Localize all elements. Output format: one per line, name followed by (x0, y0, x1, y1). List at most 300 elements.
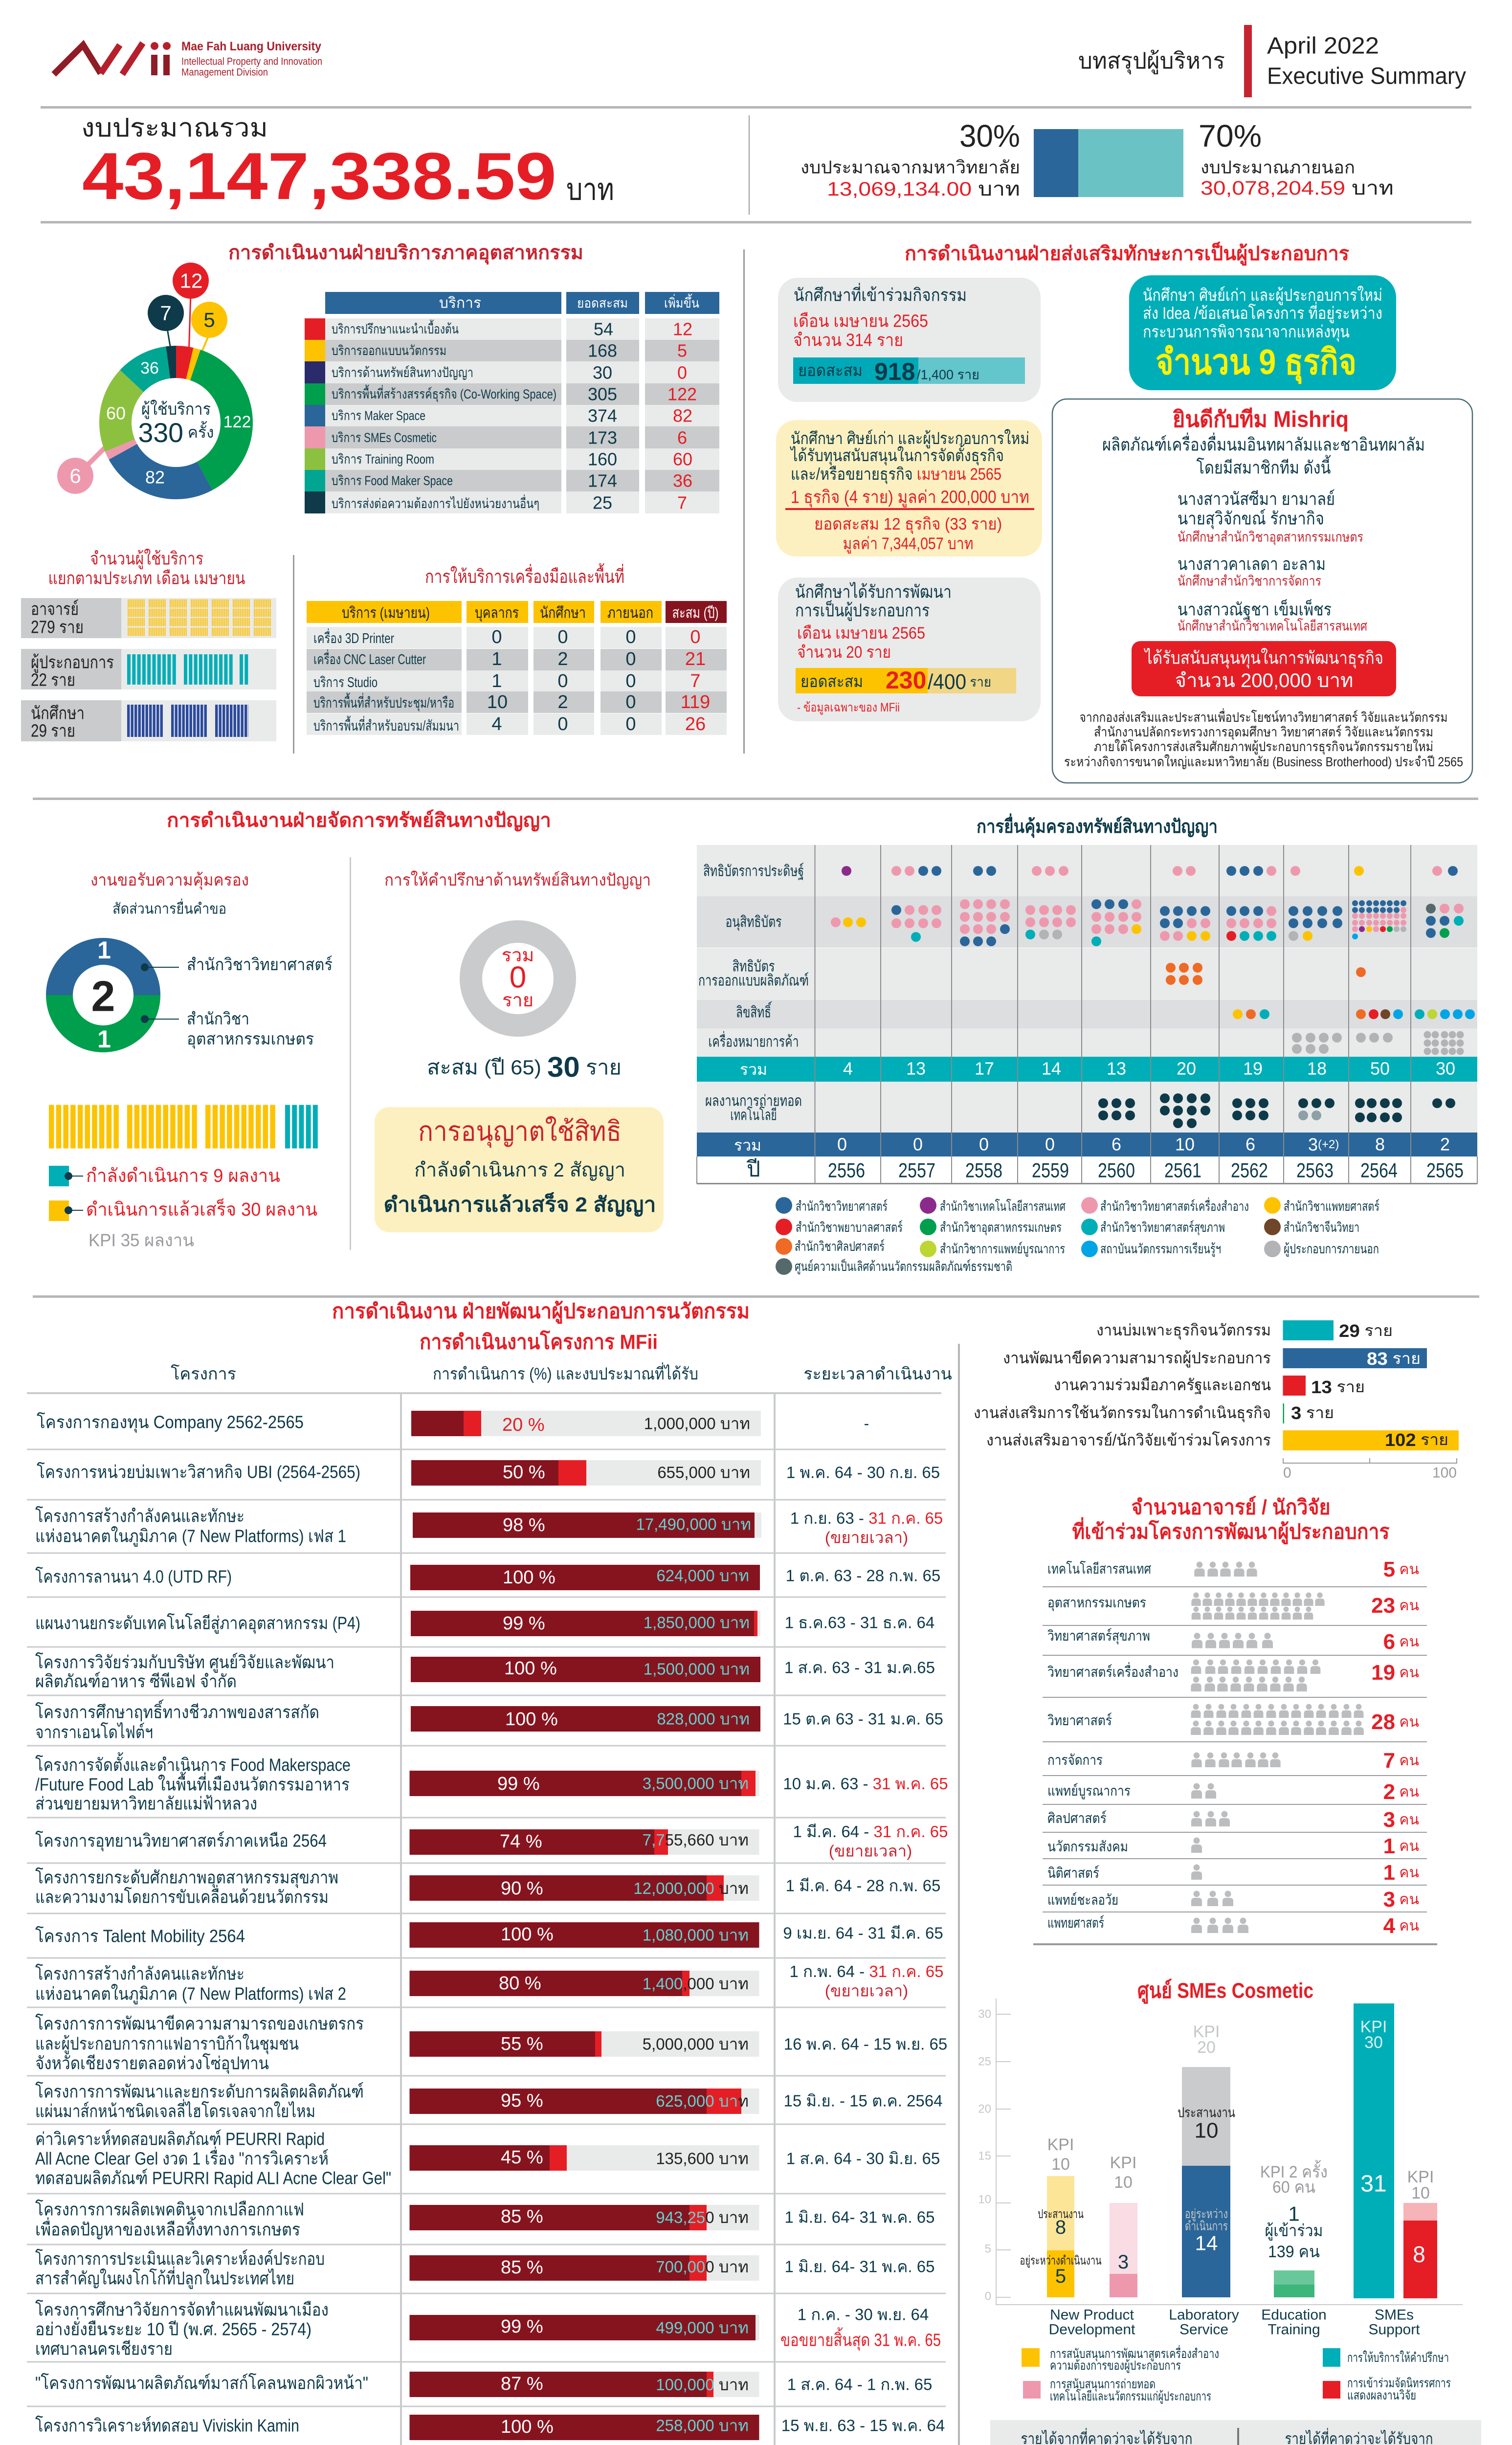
label: external budget: งบประมาณภายนอก (1201, 157, 1355, 177)
panel: industry services (21, 242, 727, 741)
chart: SMEs cosmetic: 31 (1360, 2171, 1387, 2197)
years row: 2564 (1360, 1159, 1398, 1181)
years row: 2557 (898, 1159, 935, 1181)
row: project 10 (35, 1867, 940, 1907)
table header: ระยะเวลาดำเนินงาน (803, 1365, 952, 1383)
chart: IP filings by year: อนุสิทธิบัตร (726, 913, 781, 931)
row: project 5: 1 ธ.ค.63 - 31 ธ.ค. 64 (785, 1614, 934, 1631)
row: project 13 (35, 2014, 947, 2074)
table: services: 374 (588, 406, 617, 425)
heading: users by type (48, 549, 245, 588)
years row (828, 1159, 1464, 1181)
table: tools and space: เครื่อง CNC Laser Cutter (313, 649, 426, 667)
chart: request ratio donut: 1 (97, 1025, 111, 1053)
table: tools and space: 21 (685, 649, 706, 669)
totals row: filings: 18 (1307, 1058, 1327, 1079)
row: project 7 (35, 1699, 943, 1742)
row: project 19: 87 % (501, 2374, 543, 2394)
table: services: บริการ Food Maker Space (332, 473, 453, 488)
row: project 15: 135,600 บาท (656, 2150, 749, 2167)
row: project 15: 45 % (501, 2147, 543, 2168)
row: project 3: 17,490,000 บาท (636, 1515, 751, 1534)
table: tools and space: บริการพื้นที่สำหรับประชุม/หารือ (313, 692, 454, 711)
chart: request ratio donut: สำนักวิชาวิทยาศาสตร์ (187, 956, 333, 974)
card: licensing: กำลังดำเนินการ 2 สัญญา (414, 1159, 625, 1181)
row: project 1: โครงการกองทุน Company 2562-2565 (37, 1412, 304, 1433)
legend: schools: สำนักวิชาพยาบาลศาสตร์ (796, 1220, 903, 1235)
row: project 17: โครงการการประเมินและวิเคราะห์องค์ประกอบ (35, 2248, 325, 2269)
pictogram: researchers by school: ศิลปศาสตร์ (1047, 1810, 1107, 1826)
row: project 8: โครงการจัดตั้งและดำเนินการ Food Makerspace (35, 1752, 351, 1775)
row: project 20: 258,000 บาท (656, 2417, 749, 2434)
chart: SMEs cosmetic: 5 (985, 2243, 991, 2255)
dots: copyright (1233, 1009, 1475, 1019)
legend: schools: สถาบันนวัตกรรมการเรียนรู้ฯ (1100, 1242, 1221, 1257)
row: project 5: 99 % (503, 1613, 545, 1634)
row: project 11: 100 % (501, 1924, 554, 1945)
card: congratulations Mishriq: นักศึกษาสำนักวิชาการจัดการ (1178, 573, 1321, 589)
chart: activity bars: งานบ่มเพาะธุรกิจนวัตกรรม (1096, 1321, 1271, 1340)
pictogram: students: นักศึกษา (31, 703, 85, 723)
legend: schools: ศูนย์ความเป็นเลิศด้านนวัตกรรมผลิตภัณฑ์ธรรมชาติ (795, 1258, 1012, 1274)
card: congratulations Mishriq: ผลิตภัณฑ์เครื่องดื่มนมอินทผาลัมและชาอินทผาลัม (1102, 432, 1425, 455)
chart: SMEs cosmetic: 15 (978, 2150, 991, 2162)
row: project 10: 90 % (501, 1878, 543, 1899)
years row: 2563 (1296, 1159, 1334, 1181)
header: logo and title (54, 25, 1466, 97)
KPI label: KPI 35 ผลงาน (89, 1230, 194, 1250)
table: services: 0 (677, 363, 687, 382)
legend: SMEs cosmetic: การสนับสนุนการพัฒนาสูตรเครื่องสำอาง (1050, 2345, 1219, 2361)
chart: IP filings by year: ลิขสิทธิ์ (736, 1000, 772, 1021)
chart: IP filings by year: สิทธิบัตรการประดิษฐ์ (703, 863, 804, 880)
dots: trademarks (1292, 1031, 1464, 1055)
years row: 2565 (1426, 1159, 1464, 1181)
row: project 15 (35, 2129, 940, 2188)
row: project 19: 1 ส.ค. 64 - 1 ก.พ. 65 (787, 2376, 932, 2393)
chart: SMEs cosmetic: New Product (1050, 2307, 1134, 2323)
row: project 20: 15 พ.ย. 63 - 15 พ.ค. 64 (781, 2417, 945, 2434)
chart: IP filings by year: รวม (740, 1061, 767, 1078)
row: project 5: แผนงานยกระดับเทคโนโลยีสู่ภาคอุตสาหกรรม (P4) (35, 1613, 360, 1634)
heading: IP filing chart: การยื่นคุ้มครองทรัพย์สินทางปัญญา (977, 813, 1218, 838)
stat: external 70%: 70% (1199, 118, 1262, 154)
chart: SMEs cosmetic: 8 (1055, 2217, 1066, 2238)
heading: SMEs cosmetic: ศูนย์ SMEs Cosmetic (1137, 1978, 1313, 2004)
row: project 8: /Future Food Lab ในพื้นที่เมืองนวัตกรรมอาหาร (35, 1771, 350, 1795)
row: project 14 (35, 2081, 942, 2121)
chart: IP filings by year: เทคโนโลยี (731, 1106, 777, 1124)
card: congratulations Mishriq: จำนวน 200,000 บาท (1175, 670, 1354, 691)
table: services: บริการส่งต่อความต้องการไปยังหน่วยงานอื่นๆ (332, 494, 539, 511)
row: project 13: โครงการการพัฒนาขีดความสามารถของเกษตรกร (35, 2014, 364, 2033)
table: services: 82 (673, 406, 692, 425)
table: tools and space: 1 (491, 671, 502, 691)
table: tools and space: 0 (690, 627, 701, 647)
row: project 10: 1 มี.ค. 64 - 28 ก.พ. 65 (786, 1877, 940, 1894)
logo: MFii: Mae Fah Luang University (181, 40, 321, 53)
legend: schools: สำนักวิชาอุตสาหกรรมเกษตร (940, 1220, 1062, 1236)
chart: SMEs cosmetic: Laboratory (1169, 2307, 1239, 2323)
row: project 3: แห่งอนาคตในภูมิภาค (7 New Platforms) เฟส 1 (35, 1526, 346, 1547)
table: services: 6 (677, 427, 687, 448)
table: services: 60 (673, 449, 692, 469)
totals row: transfer: 0 (1045, 1134, 1055, 1154)
row: project 17: สารสำคัญในผงโกโก้ที่ปลูกในประเทศไทย (35, 2266, 294, 2289)
chart: SMEs cosmetic: KPI (1193, 2023, 1220, 2041)
row: project 16: 85 % (501, 2206, 543, 2227)
table: services: บริการพื้นที่สร้างสรรค์ธุรกิจ (Co-Working Space) (332, 384, 556, 402)
logo: MFii: Management Division (181, 67, 268, 78)
chart: service users donut: 82 (145, 467, 165, 487)
row: project 9: (ขยายเวลา) (829, 1842, 912, 1860)
panel: innovation entrepreneur development (27, 1300, 952, 2445)
totals row: transfer: 8 (1375, 1134, 1385, 1154)
legend: SMEs cosmetic: การเข้าร่วมจัดนิทรรศการ (1347, 2376, 1451, 2390)
dots: petty patents (831, 899, 1464, 946)
pictogram: students (21, 700, 276, 741)
chart: IP filings by year: สิทธิบัตร (733, 957, 775, 975)
chart: SMEs cosmetic: 30 (978, 2008, 991, 2021)
card: students developed: การเป็นผู้ประกอบการ (795, 600, 930, 621)
row: project 2: โครงการหน่วยบ่มเพาะวิสาหกิจ UBI (2564-2565) (37, 1462, 360, 1482)
row: project 18: 99 % (501, 2316, 543, 2337)
row: project 12 (35, 1962, 943, 2005)
row: project 7: 828,000 บาท (657, 1710, 750, 1728)
logo: MFii: Intellectual Property and Innovation (181, 56, 322, 67)
row: project 4 (35, 1565, 940, 1590)
chart: IP filings by year: ปี (746, 1157, 760, 1181)
totals row: filings (843, 1058, 1455, 1079)
totals row: filings: 50 (1370, 1058, 1390, 1079)
chart: activity bars: 102 ราย (1385, 1430, 1448, 1449)
legend: schools: ผู้ประกอบการภายนอก (1284, 1242, 1379, 1257)
row: project 18: โครงการศึกษาวิจัยการจัดทำแผนพัฒนาเมือง (35, 2299, 329, 2320)
card: students joined (778, 278, 1041, 402)
table header (171, 1362, 952, 1383)
title: executive summary: Executive Summary (1267, 64, 1466, 89)
pictogram: researchers by school: 7 คน (1383, 1749, 1419, 1772)
chart: SMEs cosmetic: 60 คน (1272, 2178, 1315, 2197)
amount: external budget: 30,078,204.59 บาท (1201, 178, 1394, 199)
chart: SMEs cosmetic: 20 (1197, 2038, 1216, 2057)
chart: SMEs cosmetic: 20 (978, 2103, 991, 2115)
legend: completed: ดำเนินการแล้วเสร็จ 30 ผลงาน (86, 1198, 317, 1220)
legend: schools: สำนักวิชาเทคโนโลยีสารสนเทศ (940, 1199, 1066, 1214)
chart: SMEs cosmetic: 139 คน (1268, 2243, 1320, 2261)
row: project 2: 50 % (503, 1462, 545, 1483)
table: tools and space: 26 (685, 714, 706, 734)
chart: activity bars: 100 (1432, 1465, 1457, 1481)
chart: service users donut: 330 ครั้ง (138, 417, 214, 448)
row: project 15: 1 ส.ค. 64 - 30 มิ.ย. 65 (786, 2150, 940, 2167)
legend: SMEs cosmetic: แสดงผลงานวิจัย (1347, 2388, 1416, 2402)
chart: SMEs cosmetic (978, 1999, 1463, 2337)
row: project 9: 7,755,660 บาท (643, 1831, 749, 1848)
row: project 16: เพื่อลดปัญหาของเหลือทิ้งทางการเกษตร (35, 2216, 300, 2240)
row: project 14: 15 มิ.ย. - 15 ต.ค. 2564 (784, 2092, 942, 2110)
table: tools and space: 0 (625, 627, 636, 647)
accent bar (1244, 25, 1252, 97)
heading: section title: การดำเนินงาน ฝ่ายพัฒนาผู้ประกอบการนวัตกรรม (332, 1300, 750, 1324)
pictogram: researchers by school: วิทยาศาสตร์ (1047, 1712, 1112, 1729)
number: total budget: 43,147,338.59 (82, 139, 556, 213)
pictogram: researchers by school: 1 คน (1383, 1860, 1419, 1885)
chart: split bar (1034, 129, 1183, 197)
card: congratulations Mishriq: ยินดีกับทีม Mishriq (1173, 406, 1349, 432)
row: project 6: โครงการวิจัยร่วมกับบริษัท ศูนย์วิจัยและพัฒนา (35, 1652, 334, 1673)
card: congratulations Mishriq: โดยมีสมาชิกทีม ดังนี้ (1196, 455, 1331, 477)
card: congratulations Mishriq: ได้รับสนับสนุนทุนในการพัฒนาธุรกิจ (1143, 647, 1383, 669)
chart: service users donut: 36 (140, 359, 159, 378)
years row: 2562 (1231, 1159, 1268, 1181)
row: project 20: โครงการวิเคราะห์ทดสอบ Viviskin Kamin (35, 2416, 299, 2435)
card: students developed: /400 ราย (928, 670, 991, 693)
table: tools and space: 2 (557, 692, 568, 712)
table: services: 36 (673, 470, 692, 491)
table: tools and space: 0 (557, 671, 568, 691)
row: project 14: โครงการการพัฒนาและยกระดับการผลิตผลิตภัณฑ์ (35, 2081, 364, 2102)
years row: 2558 (965, 1159, 1002, 1181)
pictogram: researchers by school: 3 คน (1383, 1807, 1419, 1832)
unit: baht: บาท (566, 173, 614, 206)
table: services: บริการปรึกษาแนะนำเบื้องต้น (332, 319, 459, 336)
row: project 18: 1 ก.ค. - 30 พ.ย. 64 (798, 2305, 929, 2324)
row: project 15: ทดสอบผลิตภัณฑ์ PEURRI Rapid ALI Acne Clear Gel" (35, 2168, 391, 2188)
card: funded businesses: 1 ธุรกิจ (4 ราย) มูลค่า 200,000 บาท (791, 487, 1029, 508)
table: services: 305 (588, 384, 617, 404)
legend: SMEs cosmetic: ความต้องการของผู้ประกอบการ (1050, 2358, 1181, 2373)
row: project 8: 3,500,000 บาท (643, 1774, 749, 1793)
chart: SMEs cosmetic: Education (1261, 2307, 1327, 2323)
chart: request ratio donut: สำนักวิชา (187, 1010, 249, 1028)
pictogram: researchers by school: นวัตกรรมสังคม (1047, 1839, 1128, 1855)
row: project 17: 85 % (501, 2257, 543, 2278)
row: project 1 (37, 1411, 869, 1436)
chart: SMEs cosmetic: SMEs (1375, 2307, 1414, 2323)
table: tools and space: บุคลากร (475, 604, 519, 622)
card: congratulations Mishriq (1052, 399, 1472, 783)
chart: activity bars: 13 ราย (1311, 1377, 1365, 1397)
chart: SMEs cosmetic: KPI 2 ครั้ง (1260, 2160, 1328, 2181)
card: students joined: จำนวน 314 ราย (793, 330, 903, 350)
legend: SMEs cosmetic (1022, 2345, 1451, 2404)
card: congratulations Mishriq: นางสาวณัฐชา เข็มเพ็ชร (1178, 599, 1332, 620)
table: tools and space: 0 (625, 714, 636, 734)
row: project 13: 16 พ.ค. 64 - 15 พ.ย. 65 (784, 2035, 947, 2053)
row: project 14: แผ่นมาส์กหน้าชนิดเจลลี่ไฮโดรเจลจากใยไหม (35, 2099, 315, 2121)
heading: entrepreneurship: การดำเนินงานฝ่ายส่งเสริมทักษะการเป็นผู้ประกอบการ (905, 241, 1350, 266)
pictogram: researchers by school: 23 คน (1371, 1593, 1419, 1618)
row: project 13: 55 % (501, 2034, 543, 2054)
chart: service users donut: 122 (223, 413, 251, 431)
chart: SMEs cosmetic: 0 (985, 2289, 991, 2303)
chart: SMEs cosmetic: 10 (1051, 2155, 1070, 2174)
pictogram: researchers by school: วิทยาศาสตร์เครื่องสำอาง (1047, 1662, 1178, 1680)
row: project 3: โครงการสร้างกำลังคนและทักษะ (35, 1506, 245, 1526)
card: proposals in progress: จำนวน 9 ธุรกิจ (1156, 343, 1356, 384)
card: students developed: - ข้อมูลเฉพาะของ MFii (797, 701, 900, 715)
card: congratulations Mishriq: จากกองส่งเสริมและประสานเพื่อประโยชน์ทางวิทยาศาสตร์ วิจัยและนวัตกรรม (1080, 708, 1447, 725)
chart: SMEs cosmetic: KPI (1407, 2168, 1434, 2186)
totals row: transfer: 10 (1175, 1134, 1195, 1154)
pictogram: lecturers: 279 ราย (31, 617, 84, 637)
row: project 19 (35, 2372, 932, 2397)
chart: SMEs cosmetic: อยู่ระหว่างดำเนินงาน (1020, 2254, 1101, 2268)
row: project 7: 15 ต.ค 63 - 31 ม.ค. 65 (783, 1710, 943, 1728)
table: services: 173 (588, 427, 617, 448)
table header: การดำเนินการ (%) และงบประมาณที่ได้รับ (433, 1362, 698, 1383)
row: project 20: 100 % (501, 2417, 554, 2437)
heading: users by type: แยกตามประเภท เดือน เมษายน (48, 568, 245, 588)
table: tools and space: 1 (491, 649, 502, 669)
card: licensing: ดำเนินการแล้วเสร็จ 2 สัญญา (383, 1192, 656, 1217)
legend: schools (776, 1197, 1379, 1275)
card: congratulations Mishriq: นางสาวนัสซีมา ยามาลย์ (1178, 489, 1335, 509)
dots: patents (842, 866, 1458, 876)
card: funded businesses: ได้รับทุนสนับสนุนในการจัดตั้งธุรกิจ (789, 444, 1004, 466)
pictogram: researchers by school: วิทยาศาสตร์สุขภาพ (1047, 1628, 1150, 1645)
row: project 9: โครงการอุทยานวิทยาศาสตร์ภาคเหนือ 2564 (35, 1831, 327, 1851)
legend: schools: สำนักวิชาการแพทย์บูรณาการ (940, 1241, 1065, 1257)
row: project 2 (37, 1460, 940, 1486)
chart: SMEs cosmetic: Support (1368, 2322, 1420, 2337)
totals row: filings: 13 (1107, 1058, 1126, 1079)
row: project 9: 1 มี.ค. 64 - 31 ก.ค. 65 (793, 1822, 948, 1841)
row: project 11: 1,080,000 บาท (643, 1926, 749, 1944)
pictogram: researchers by school: อุตสาหกรรมเกษตร (1047, 1595, 1146, 1611)
row: project 6: 100 % (504, 1658, 557, 1679)
table: services: ยอดสะสม (577, 296, 628, 311)
legend: schools: สำนักวิชาแพทยศาสตร์ (1284, 1199, 1379, 1214)
pictogram: lecturers (21, 598, 276, 638)
panel: entrepreneurship promotion (776, 241, 1472, 783)
stat: university 30%: 30% (959, 118, 1020, 154)
row: project 13: และผู้ประกอบการกาแฟอาราบิก้าในชุมชน (35, 2033, 299, 2055)
row: project 9: 74 % (500, 1831, 542, 1852)
table: services: 25 (593, 493, 612, 512)
card: students joined: เดือน เมษายน 2565 (793, 311, 928, 331)
row: project 16: โครงการการผลิตเพคตินจากเปลือกกาแฟ (35, 2200, 304, 2219)
chart: SMEs cosmetic: ผู้เข้าร่วม (1265, 2222, 1323, 2241)
card: funded businesses (776, 420, 1042, 556)
logo: MFii (54, 40, 322, 78)
chart: SMEs cosmetic: ประสานงาน (1178, 2105, 1235, 2120)
card: licensing: การอนุญาตใช้สิทธิ (418, 1116, 622, 1148)
totals row: filings: 20 (1177, 1058, 1196, 1079)
chart: SMEs cosmetic: Service (1179, 2322, 1228, 2337)
dots: design patents (1166, 963, 1366, 985)
totals row: filings: 19 (1243, 1058, 1263, 1079)
row: project 5 (35, 1611, 934, 1636)
table: tools and space: 4 (491, 714, 502, 734)
chart: activity bars: 83 ราย (1367, 1349, 1421, 1368)
row: project 3 (35, 1506, 943, 1547)
chart: SMEs cosmetic: 14 (1195, 2232, 1218, 2254)
pictogram: researchers by school: การจัดการ (1047, 1753, 1103, 1768)
row: project 7: โครงการศึกษาฤทธิ์ทางชีวภาพของสารสกัด (35, 1699, 319, 1722)
chart: consulting ring: รวม (502, 945, 534, 966)
card: proposals in progress: นักศึกษา ศิษย์เก่า และผู้ประกอบการใหม่ (1143, 286, 1382, 305)
row: project 19: 100,000 บาท (656, 2376, 749, 2393)
pictogram: researchers by school: 4 คน (1383, 1914, 1419, 1937)
chart: service users donut: 5 (203, 308, 215, 332)
heading: users by type: จำนวนผู้ใช้บริการ (90, 549, 203, 569)
row: project 8: 99 % (497, 1774, 540, 1794)
row: project 12: โครงการสร้างกำลังคนและทักษะ (35, 1964, 245, 1983)
row: project 17: 1 มิ.ย. 64- 31 พ.ค. 65 (785, 2257, 934, 2276)
subheading: request ratio: สัดส่วนการยื่นคำขอ (112, 899, 226, 917)
pictogram: researchers by school: นิติศาสตร์ (1047, 1865, 1099, 1881)
row: project 16: 1 มิ.ย. 64- 31 พ.ค. 65 (785, 2208, 934, 2226)
years row: 2559 (1032, 1159, 1069, 1181)
totals row: filings: 17 (975, 1058, 994, 1079)
row: project 8: 10 ม.ค. 63 - 31 พ.ค. 65 (783, 1774, 948, 1793)
chart: service users donut: 12 (180, 269, 202, 292)
table: tools and space: บริการ Studio (313, 675, 378, 690)
table: tools and space (307, 601, 727, 735)
table: tools and space: 0 (557, 714, 568, 734)
row: project 3: 98 % (503, 1515, 545, 1535)
chart: activity bars: งานความร่วมมือภาครัฐและเอกชน (1054, 1376, 1271, 1395)
pictogram: entrepreneurs: 22 ราย (31, 670, 75, 689)
row: project 19: "โครงการพัฒนาผลิตภัณฑ์มาสก์โคลนพอกผิวหน้า" (35, 2373, 368, 2393)
pictogram: students: 29 ราย (31, 721, 75, 740)
table: tools and space: บริการพื้นที่สำหรับอบรม/สัมมนา (313, 715, 459, 734)
pictogram: researchers by school: 1 คน (1383, 1834, 1419, 1858)
row: project 11 (35, 1922, 943, 1948)
table: tools and space: 0 (625, 649, 636, 669)
stat: consulting accumulated: สะสม (ปี 65) 30 ราย (427, 1051, 622, 1083)
legend: schools: สำนักวิชาจีนวิทยา (1284, 1220, 1359, 1235)
heading: industry services: การดำเนินงานฝ่ายบริการภาคอุตสาหกรรม (228, 242, 583, 265)
table: services: 160 (588, 449, 617, 469)
panel: budget split (800, 118, 1394, 200)
table: tools and space: 0 (491, 627, 502, 647)
row: project 18 (35, 2299, 941, 2359)
heading: lecturers and researchers (1072, 1495, 1390, 1544)
row: project 7: 100 % (505, 1709, 558, 1730)
chart: SMEs cosmetic: 25 (978, 2055, 991, 2068)
chart: SMEs cosmetic: 10 (1411, 2184, 1430, 2202)
heading: tools and space: การให้บริการเครื่องมือและพื้นที่ (425, 563, 624, 587)
chart: IP filings by year (697, 845, 1477, 1184)
totals row: filings: 30 (1436, 1058, 1455, 1079)
row: project 18: 499,000 บาท (656, 2319, 749, 2336)
row: project 9 (35, 1822, 948, 1860)
card: funded businesses: และ/หรือขยายธุรกิจ เมษายน 2565 (791, 465, 1001, 484)
card: funded businesses: ยอดสะสม 12 ธุรกิจ (33 ราย) (814, 515, 1002, 534)
table: services: 7 (677, 493, 687, 512)
card: licensing (375, 1107, 664, 1232)
chart: SMEs cosmetic: KPI (1110, 2154, 1136, 2172)
chart: activity bars: 0 (1283, 1465, 1291, 1481)
card: funded businesses: นักศึกษา ศิษย์เก่า และผู้ประกอบการใหม่ (791, 429, 1029, 448)
card: students developed: นักศึกษาได้รับการพัฒนา (795, 582, 952, 601)
row: project 4: โครงการลานนา 4.0 (UTD RF) (35, 1567, 232, 1586)
table: services: 30 (593, 363, 612, 382)
chart: SMEs cosmetic: ดำเนินการ (1185, 2219, 1228, 2233)
totals row: filings: 14 (1042, 1058, 1061, 1079)
legend: schools: สำนักวิชาวิทยาศาสตร์เครื่องสำอาง (1100, 1197, 1249, 1214)
card: congratulations Mishriq: นักศึกษาสำนักวิชาเทคโนโลยีสารสนเทศ (1178, 618, 1367, 634)
card: congratulations Mishriq: นางสาวคาเลดา อะลาม (1178, 554, 1326, 574)
row: project 12: 1,400,000 บาท (643, 1975, 749, 1992)
card: students developed: 230 (886, 667, 926, 694)
row: project 20 (35, 2415, 945, 2440)
row: project 13: จังหวัดเชียงรายตลอดห่วงโซ่อุปทาน (35, 2053, 269, 2074)
row: project 14: 625,000 บาท (656, 2092, 749, 2110)
